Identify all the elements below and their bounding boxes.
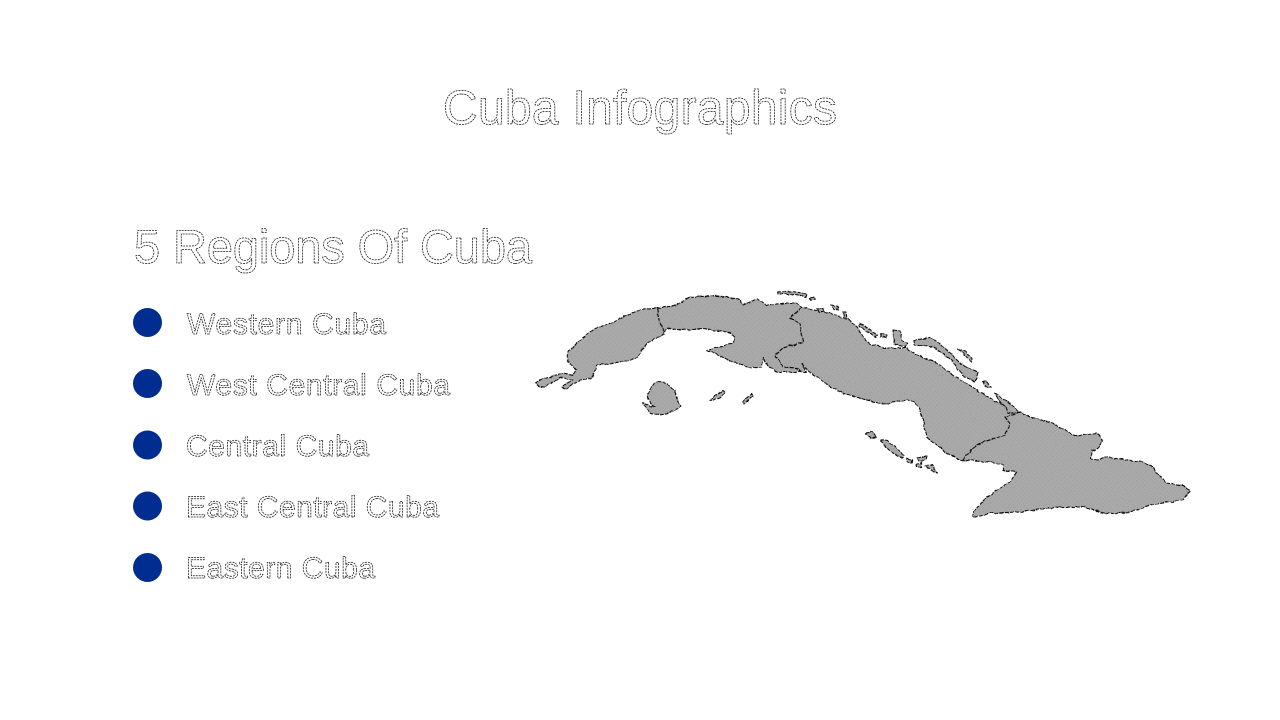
legend item: West Central Cuba: West Central Cuba bbox=[187, 369, 450, 402]
region border: West Central / Central bbox=[775, 308, 803, 372]
map of Cuba bbox=[535, 291, 1190, 517]
legend item: Western Cuba: Western Cuba bbox=[187, 308, 386, 341]
south islets bbox=[710, 390, 725, 401]
mainland bbox=[535, 296, 1190, 517]
region border: Western / West Central bbox=[657, 308, 665, 335]
title: Cuba Infographics bbox=[443, 82, 837, 135]
heading: 5 regions of Cuba: 5 Regions Of Cuba bbox=[134, 220, 533, 273]
legend list bbox=[133, 308, 450, 585]
legend item: East Central Cuba: East Central Cuba bbox=[186, 491, 439, 524]
region border: East Central / Eastern bbox=[962, 412, 1020, 460]
Isle of Youth bbox=[642, 382, 681, 414]
legend item: Central Cuba: Central Cuba bbox=[186, 430, 369, 463]
north cays bbox=[777, 291, 807, 297]
south cays bbox=[865, 432, 877, 438]
legend item: Eastern Cuba: Eastern Cuba bbox=[186, 552, 375, 585]
